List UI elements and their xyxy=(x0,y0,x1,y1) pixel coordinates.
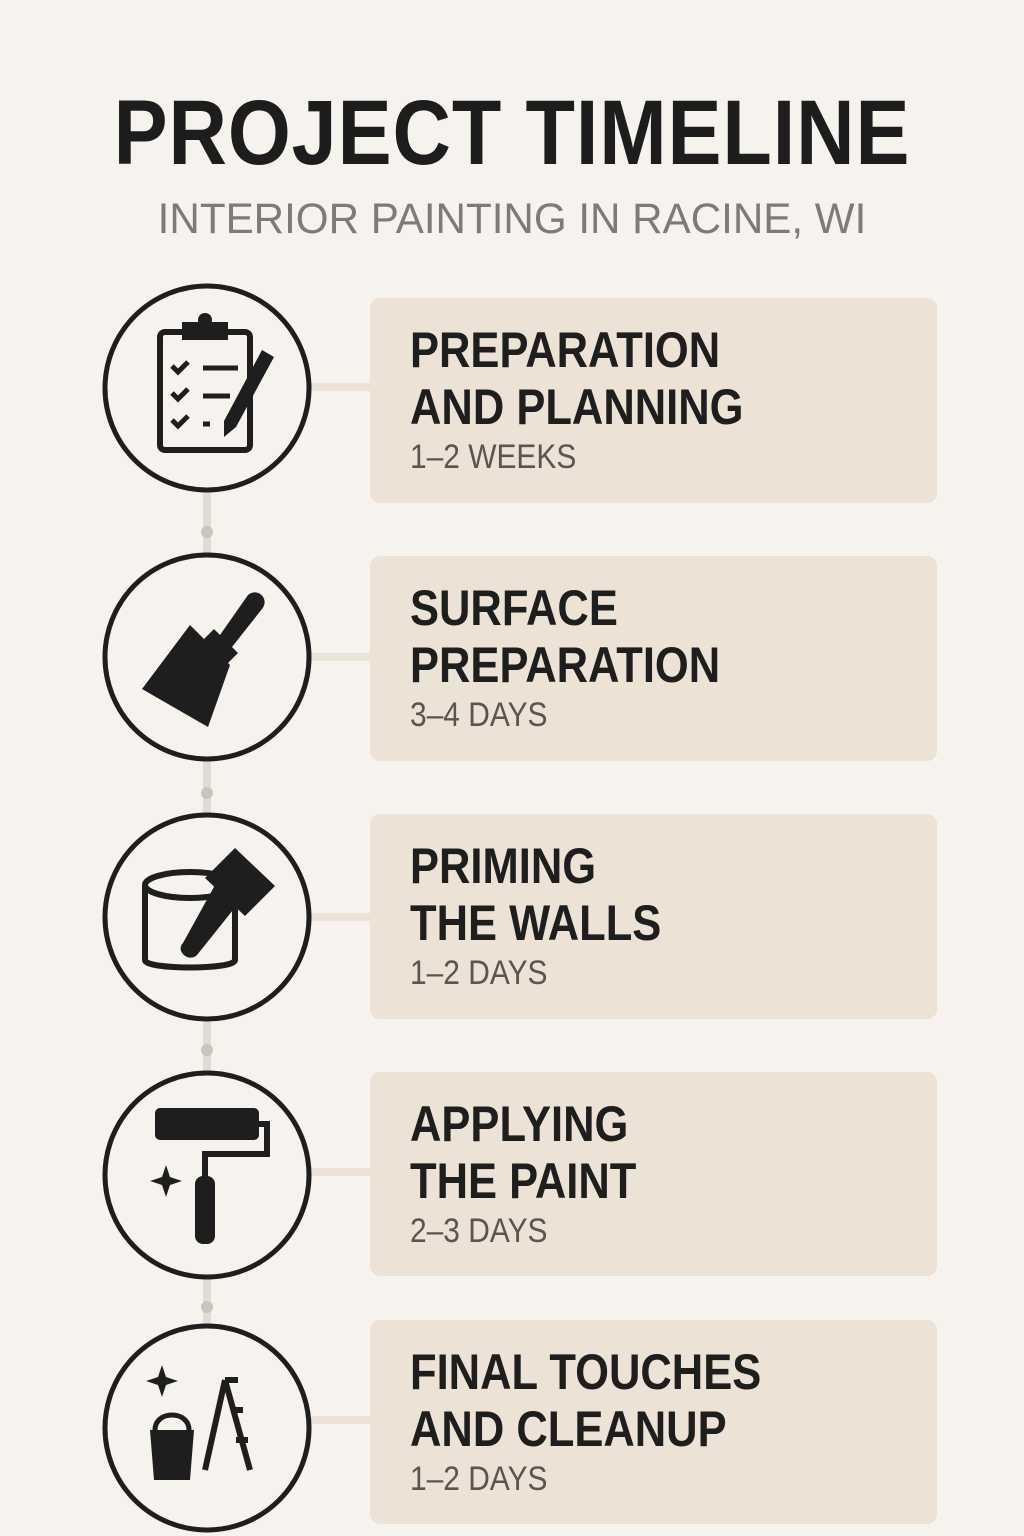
card 3: 1–2 DAYS xyxy=(410,954,548,992)
card 2: 3–4 DAYS xyxy=(410,696,548,734)
card 3 xyxy=(370,814,937,1019)
card 5: FINAL TOUCHES xyxy=(410,1344,761,1400)
title: PROJECT TIMELINE xyxy=(114,82,910,184)
card 2: SURFACE xyxy=(410,580,618,636)
card 2: PREPARATION xyxy=(410,637,720,693)
card 4: THE PAINT xyxy=(410,1153,636,1209)
card 1 xyxy=(370,298,937,503)
card 5: AND CLEANUP xyxy=(410,1401,727,1457)
card 3: THE WALLS xyxy=(410,895,661,951)
card 5 xyxy=(370,1320,937,1524)
card 1: PREPARATION xyxy=(410,322,720,378)
card 1: 1–2 WEEKS xyxy=(410,438,576,476)
card 1: AND PLANNING xyxy=(410,379,743,435)
card 5: 1–2 DAYS xyxy=(410,1460,548,1498)
card 3: PRIMING xyxy=(410,838,596,894)
card 4: 2–3 DAYS xyxy=(410,1212,548,1250)
card 4: APPLYING xyxy=(410,1096,628,1152)
card 2 xyxy=(370,556,937,761)
card 4 xyxy=(370,1072,937,1276)
subtitle: INTERIOR PAINTING IN RACINE, WI xyxy=(158,195,866,243)
